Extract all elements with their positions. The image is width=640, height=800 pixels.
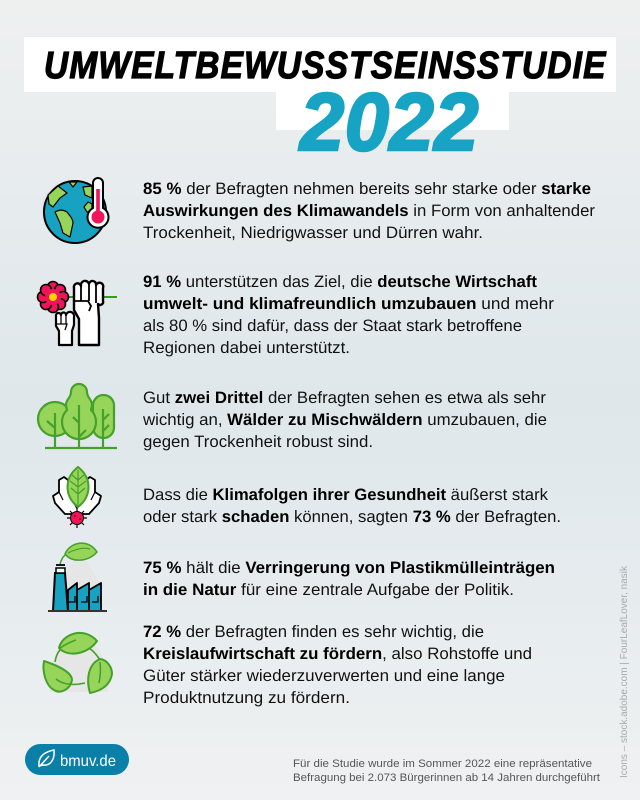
badge: bmuv.de: bmuv.de bbox=[60, 753, 116, 770]
badge: bmuv.de bbox=[25, 744, 129, 775]
text: Wirtschaft: 91 % unterstützen das Ziel, die deutsche Wirtschaft bbox=[143, 273, 537, 291]
image credit: Icons – stock.adobe.com | FourLeafLover, nasik bbox=[618, 565, 630, 778]
text: Klimawandel: Trockenheit, Niedrigwasser und Dürren wahr. bbox=[143, 224, 483, 242]
text: Kreislaufwirtschaft: 72 % der Befragten finden es sehr wichtig, die bbox=[143, 623, 484, 641]
text: Klimawandel: 85 % der Befragten nehmen bereits sehr starke oder starke bbox=[143, 180, 591, 198]
footnote: Für die Studie wurde im Sommer 2022 eine repräsentative bbox=[293, 758, 592, 770]
text: Plastikmüll: 75 % hält die Verringerung von Plastikmülleinträgen bbox=[143, 559, 555, 577]
text: Kreislaufwirtschaft: Güter stärker wiederzuverwerten und eine lange bbox=[143, 667, 505, 685]
text: Wirtschaft: als 80 % sind dafür, dass der Staat stark betroffene bbox=[143, 317, 522, 335]
text: Wirtschaft: Regionen dabei unterstützt. bbox=[143, 339, 350, 357]
text: Gesundheit: Dass die Klimafolgen ihrer Gesundheit äußerst stark bbox=[143, 486, 549, 504]
icon: hands with leaf and virus bbox=[53, 467, 101, 528]
text: Wälder: gegen Trockenheit robust sind. bbox=[143, 433, 373, 451]
text: Wirtschaft: umwelt- und klimafreundlich umzubauen und mehr bbox=[143, 295, 555, 313]
text: Plastikmüll: in die Natur für eine zentrale Aufgabe der Politik. bbox=[143, 581, 514, 599]
icon: recycling leaves bbox=[43, 633, 112, 693]
title bbox=[24, 37, 616, 168]
text: Wälder: Gut zwei Drittel der Befragten sehen es etwa als sehr bbox=[143, 389, 547, 407]
text: Klimawandel bbox=[143, 180, 596, 242]
footnote: Befragung bei 2.073 Bürgerinnen ab 14 Jahren durchgeführt bbox=[293, 772, 600, 784]
text: Gesundheit: oder stark schaden können, sagten 73 % der Befragten. bbox=[143, 508, 561, 526]
icon: flower and raised fists bbox=[38, 281, 117, 345]
title: UMWELTBEWUSSTSEINSSTUDIE bbox=[44, 44, 606, 86]
text: Klimawandel: Auswirkungen des Klimawandels in Form von anhaltender bbox=[143, 202, 596, 220]
footnote bbox=[293, 758, 600, 784]
text: Kreislaufwirtschaft bbox=[143, 623, 532, 707]
text: Wälder: wichtig an, Wälder zu Mischwäldern umzubauen, die bbox=[142, 411, 547, 429]
text: Plastikmüll bbox=[143, 559, 555, 599]
text: Wälder bbox=[142, 389, 547, 451]
text: Gesundheit bbox=[143, 486, 561, 526]
icon: earth with thermometer bbox=[41, 178, 109, 243]
text: Wirtschaft bbox=[143, 273, 555, 357]
icon: trees bbox=[38, 384, 117, 448]
title: 2022 bbox=[298, 77, 479, 168]
icon: factory with leaf bbox=[48, 543, 107, 611]
text: Kreislaufwirtschaft: Produktnutzung zu fördern. bbox=[143, 689, 350, 707]
text: Kreislaufwirtschaft: Kreislaufwirtschaft zu fördern , also Rohstoffe und bbox=[143, 645, 532, 663]
